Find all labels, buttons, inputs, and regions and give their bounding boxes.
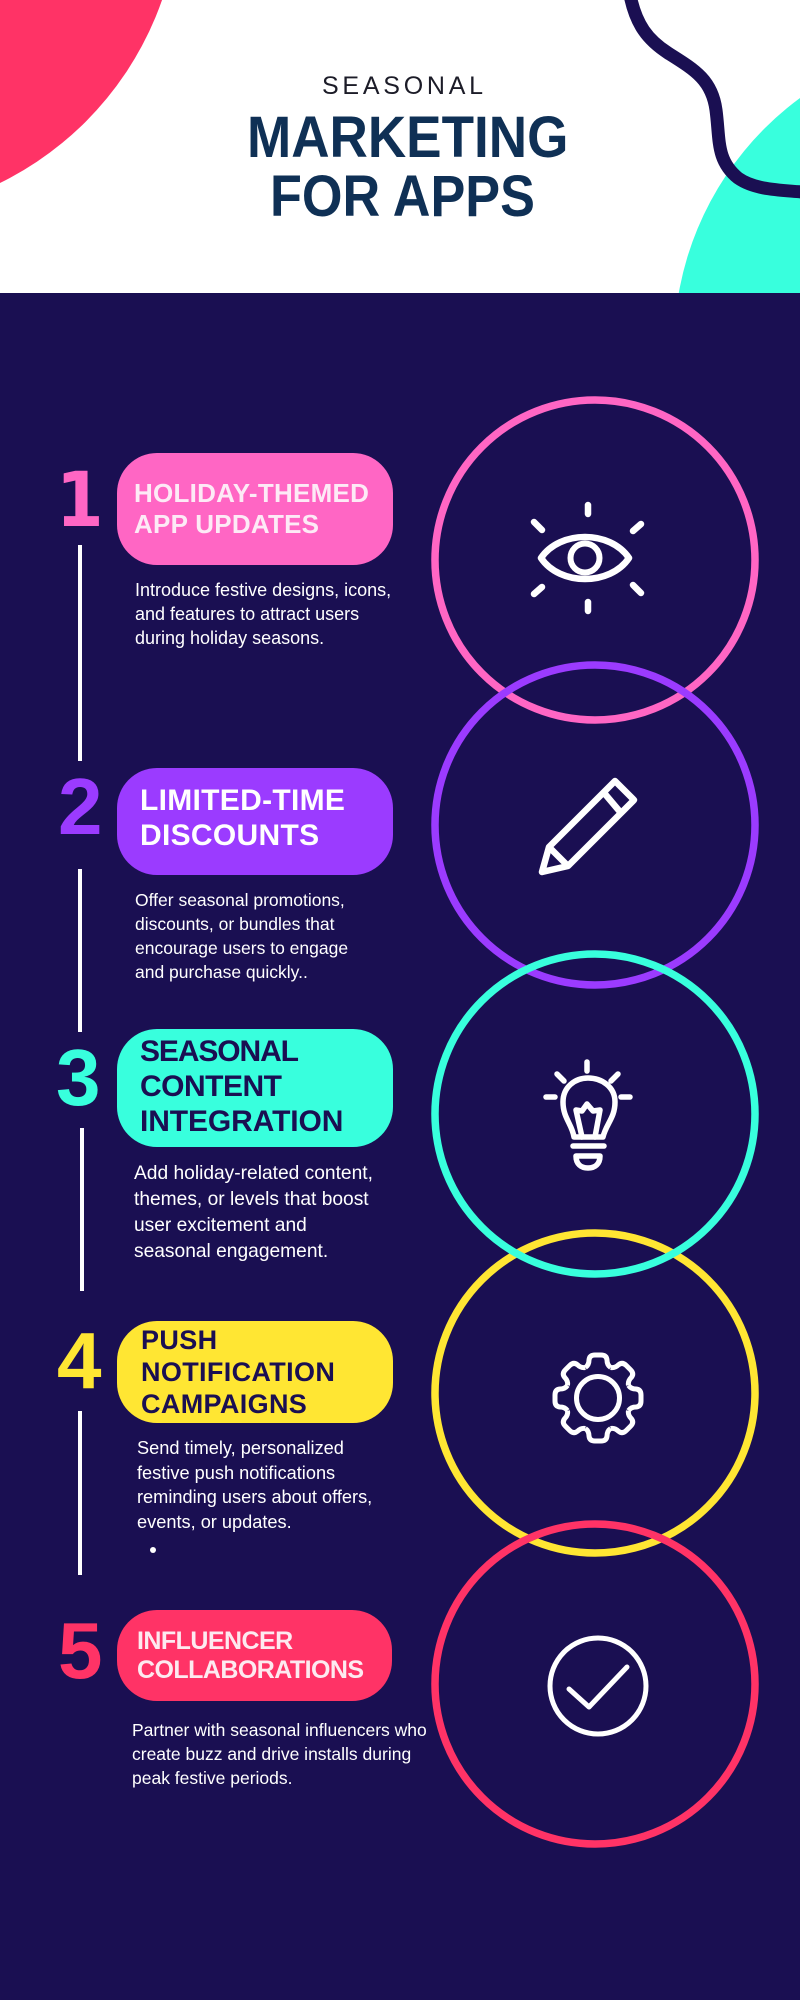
body 5: peak festive periods. <box>132 1768 293 1788</box>
heading pill 1 <box>117 453 393 565</box>
body 3: themes, or levels that boost <box>134 1189 369 1210</box>
body 1: during holiday seasons. <box>135 628 324 648</box>
body 5: Partner with seasonal influencers who <box>132 1720 427 1740</box>
heading pill 3 <box>117 1029 393 1147</box>
body 1: Introduce festive designs, icons, <box>135 580 391 600</box>
step 2 <box>58 762 393 1032</box>
icon: gear <box>552 1352 644 1444</box>
body 3: Add holiday-related content, <box>134 1163 373 1184</box>
title: FOR APPS <box>270 164 535 229</box>
number 2: 2 <box>58 762 102 851</box>
body 1: and features to attract users <box>135 604 359 624</box>
body 4: festive push notifications <box>137 1462 335 1482</box>
body 3 <box>134 1163 373 1262</box>
heading 1 <box>134 478 369 539</box>
connector 1 <box>78 545 82 761</box>
number 5: 5 <box>58 1606 102 1695</box>
body 3: seasonal engagement. <box>134 1241 328 1262</box>
body 2: discounts, or bundles that <box>135 914 334 934</box>
heading 1: HOLIDAY-THEMED <box>134 478 369 508</box>
body 4: Send timely, personalized <box>137 1438 344 1458</box>
step 4 <box>57 1316 393 1575</box>
number 3: 3 <box>56 1033 100 1122</box>
connector 3 <box>80 1128 84 1291</box>
heading 2: LIMITED-TIME <box>140 784 345 817</box>
heading 4: NOTIFICATION <box>141 1357 335 1387</box>
body 5 <box>132 1720 427 1788</box>
icon: pencil <box>538 778 638 876</box>
heading 3: SEASONAL <box>140 1035 298 1068</box>
bullet <box>150 1547 156 1553</box>
step 1 <box>56 453 393 761</box>
title: MARKETING <box>247 105 568 170</box>
heading 3: INTEGRATION <box>140 1105 343 1138</box>
connector 4 <box>78 1411 82 1575</box>
body 2: Offer seasonal promotions, <box>135 890 345 910</box>
title <box>247 105 568 229</box>
heading 3 <box>140 1035 343 1138</box>
body 4: events, or updates. <box>137 1512 292 1532</box>
connector 2 <box>78 869 82 1032</box>
body 2 <box>135 890 348 982</box>
heading 2 <box>140 784 345 852</box>
number 4: 4 <box>57 1316 102 1405</box>
heading 4: PUSH <box>141 1325 217 1355</box>
header shapes <box>0 0 800 293</box>
heading pill 5 <box>117 1610 392 1701</box>
heading 2: DISCOUNTS <box>140 819 319 852</box>
body 4: reminding users about offers, <box>137 1487 372 1507</box>
icon: check mark <box>548 1636 648 1736</box>
number 1: 1 <box>56 455 104 544</box>
heading 1: APP UPDATES <box>134 509 319 539</box>
heading 5: INFLUENCER <box>137 1627 293 1655</box>
heading 5: COLLABORATIONS <box>137 1656 364 1684</box>
heading 5 <box>137 1627 364 1684</box>
body 2: and purchase quickly.. <box>135 962 308 982</box>
step 5 <box>58 1606 427 1788</box>
heading 4: CAMPAIGNS <box>141 1389 307 1419</box>
body 3: user excitement and <box>134 1215 307 1236</box>
icon: light bulb <box>543 1059 633 1171</box>
heading 3: CONTENT <box>140 1070 282 1103</box>
icon: eye <box>530 502 644 614</box>
step 3 <box>56 1029 393 1291</box>
heading pill 2 <box>117 768 393 875</box>
subtitle: SEASONAL <box>322 72 487 100</box>
heading 4 <box>141 1325 335 1419</box>
body 1 <box>135 580 391 648</box>
body 5: create buzz and drive installs during <box>132 1744 411 1764</box>
body 2: encourage users to engage <box>135 938 348 958</box>
heading pill 4 <box>117 1321 393 1423</box>
body 4 <box>137 1438 372 1532</box>
